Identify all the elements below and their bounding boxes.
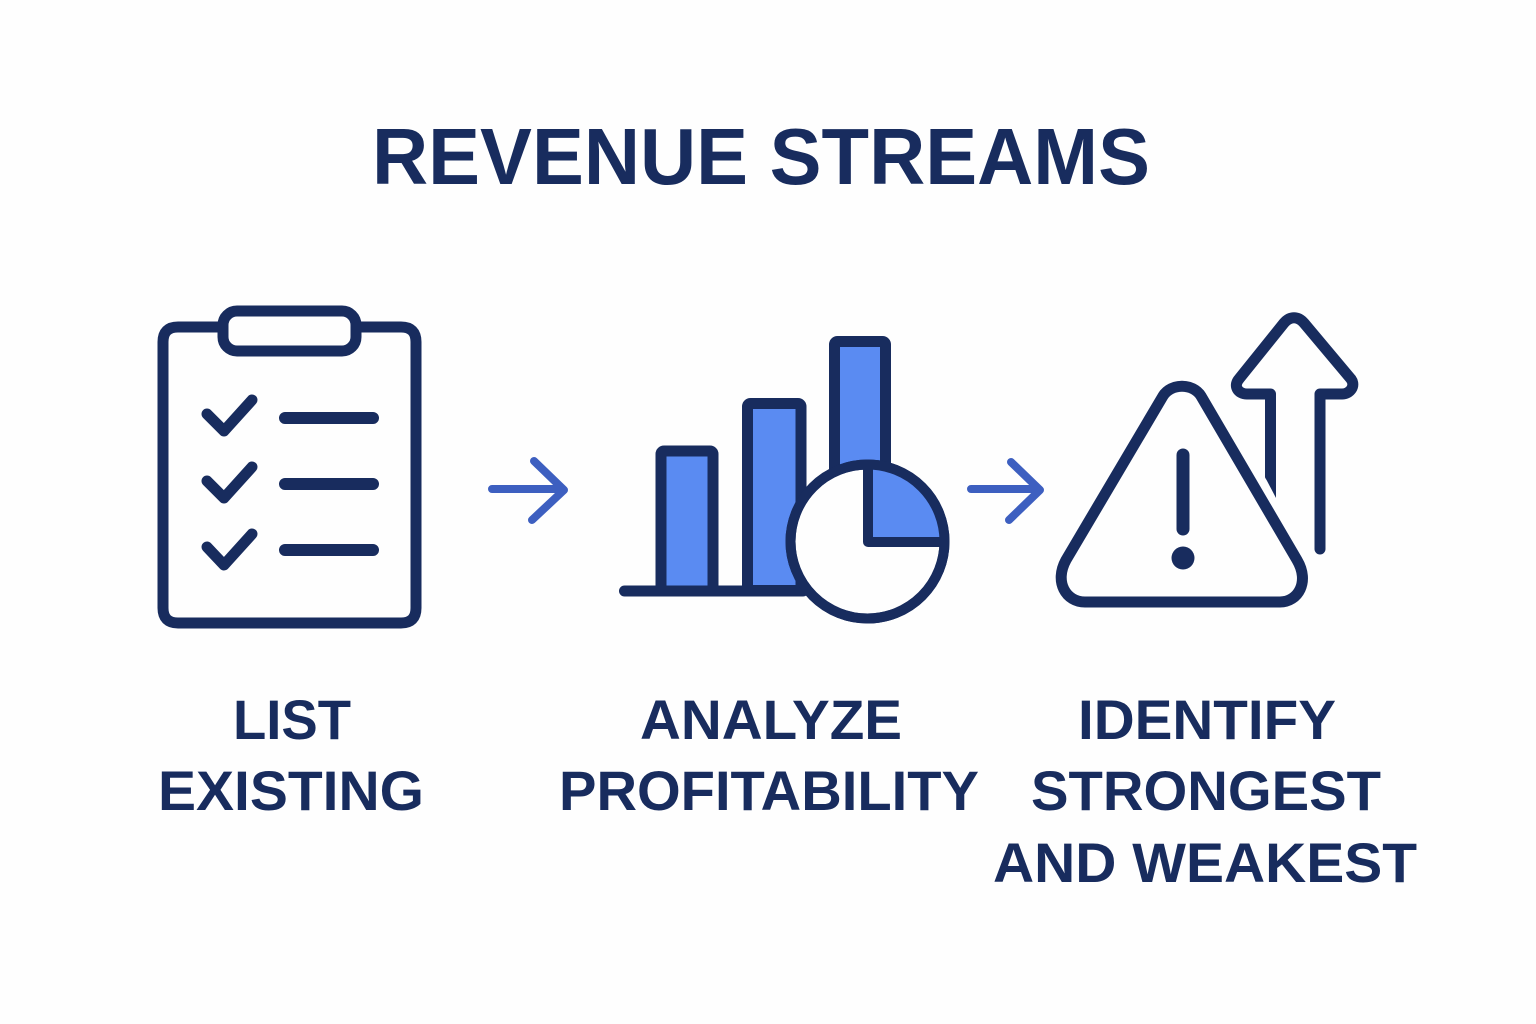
label: analyze profitability: ANALYZE: [640, 688, 902, 751]
icon: clipboard checklist: [163, 311, 416, 623]
pie chart: [790, 464, 944, 618]
label: list existing: EXISTING: [158, 759, 424, 822]
title: REVENUE STREAMS: [372, 112, 1150, 201]
icon: warning triangle with up arrow: [1061, 318, 1353, 602]
label: analyze profitability: PROFITABILITY: [559, 759, 979, 822]
bar 2: [748, 404, 801, 590]
label: identify strongest and weakest: [993, 688, 1417, 894]
arrow: step two to three: [971, 462, 1040, 520]
label: analyze profitability: [559, 688, 979, 822]
label: identify strongest and weakest: AND WEAKEST: [993, 831, 1417, 894]
icon: bar chart and pie chart: [624, 342, 944, 618]
label: identify strongest and weakest: STRONGEST: [1031, 759, 1381, 822]
label: identify strongest and weakest: IDENTIFY: [1078, 688, 1336, 751]
label: list existing: [158, 688, 424, 822]
bar 1: [661, 451, 713, 591]
arrow: step one to two: [492, 461, 564, 520]
bar 3: [834, 342, 886, 482]
label: list existing: LIST: [233, 688, 351, 751]
